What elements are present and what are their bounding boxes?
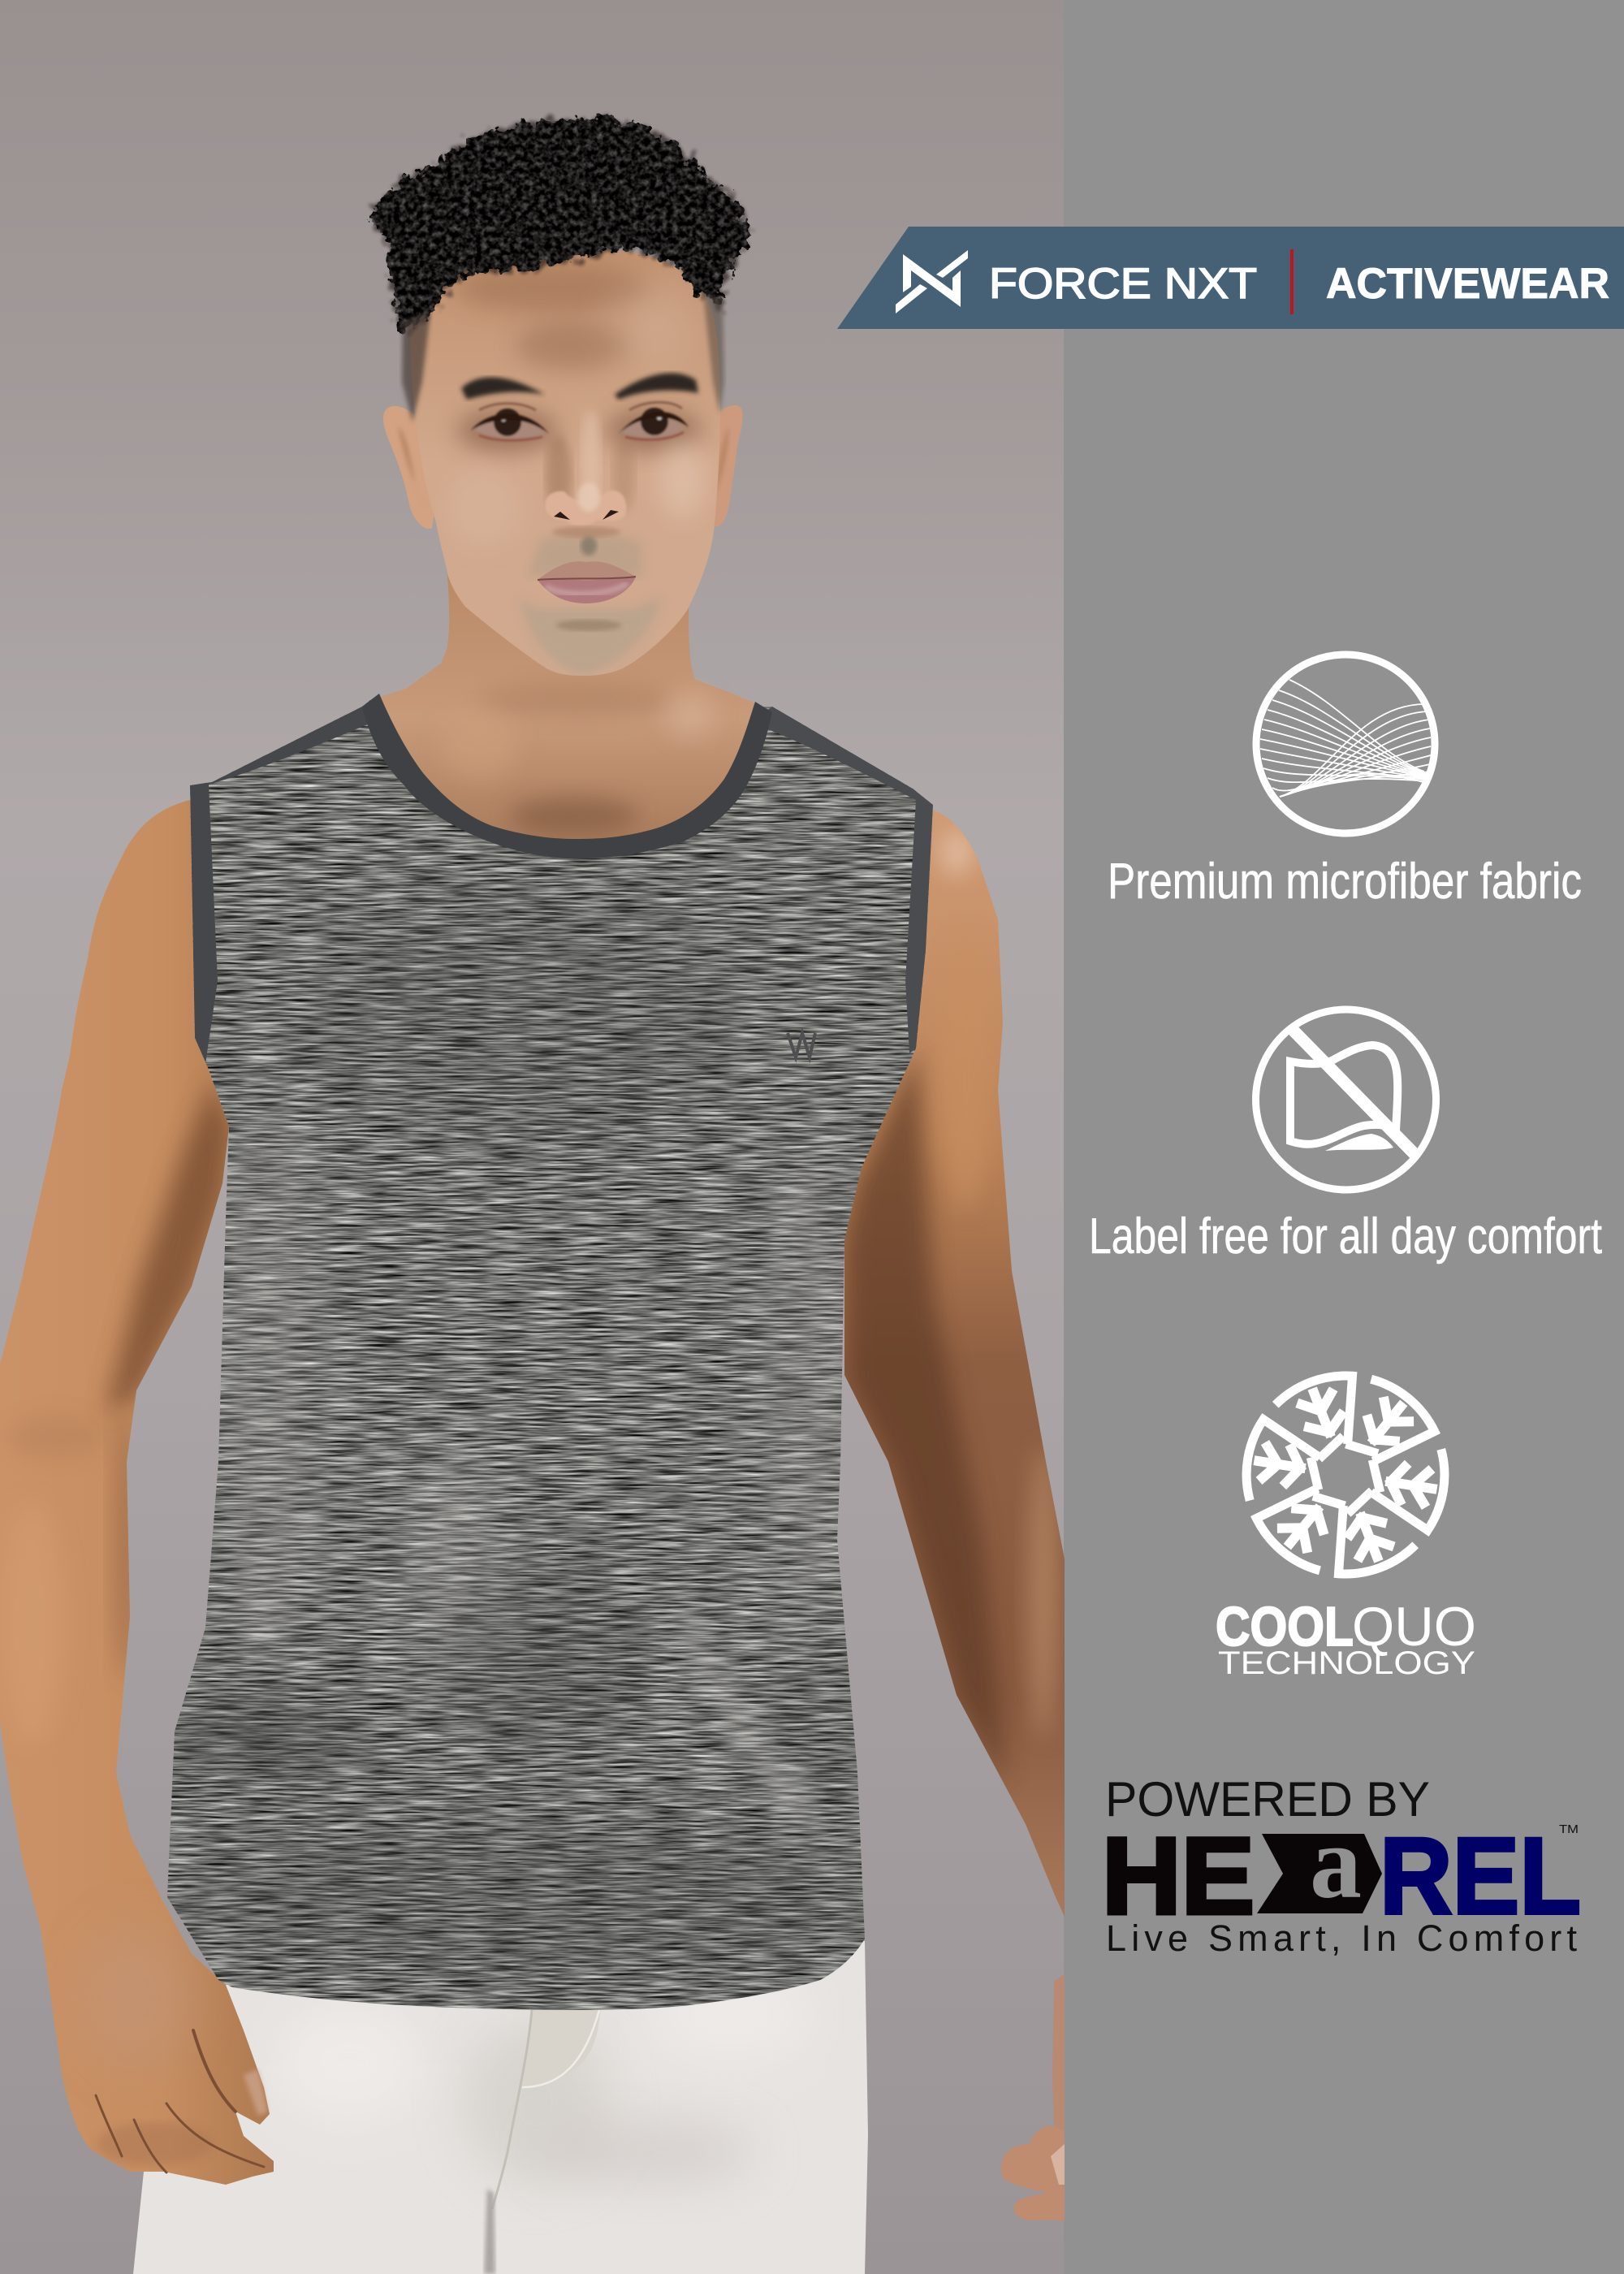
- chest logo: [788, 1033, 815, 1057]
- powered by: POWERED BY: [1105, 1772, 1430, 1827]
- feature: coolquo technology: [1216, 1364, 1476, 1681]
- head: [369, 118, 748, 676]
- feature: microfiber fabric: [1108, 655, 1582, 910]
- brand banner: [837, 227, 1624, 329]
- icon: crossed-out tag: [1255, 1009, 1436, 1190]
- brand name: FORCE NXT: [989, 260, 1257, 308]
- white shorts: [133, 1941, 868, 2274]
- hexarel wordmark: [1102, 1805, 1581, 1937]
- left hand fingers: [96, 2030, 264, 2172]
- powered by hexarel logo: [1102, 1772, 1581, 1959]
- right arm: [844, 811, 1065, 1917]
- tagline: Live Smart, In Comfort: [1106, 1917, 1577, 1959]
- hair: [369, 118, 748, 422]
- icon: woven fibers: [1256, 655, 1435, 833]
- activewear label: ACTIVEWEAR: [1326, 260, 1609, 308]
- coolquo wordmark: [1216, 1596, 1476, 1681]
- brand logo mark: [896, 250, 968, 313]
- hexarel wordmark: REL: [1380, 1816, 1581, 1937]
- right side panel: [1064, 0, 1624, 2274]
- photo background: [0, 0, 1065, 2274]
- dark yoke and armhole binding: [190, 707, 382, 1070]
- right hand at panel edge: [1001, 1974, 1065, 2221]
- left arm: [0, 800, 274, 2185]
- fly placket: [529, 2009, 601, 2063]
- coolquo wordmark: COOL: [1216, 1596, 1354, 1658]
- hexarel wordmark: a: [1310, 1805, 1362, 1920]
- hexarel wordmark: TM: [1559, 1822, 1579, 1836]
- coolquo wordmark: TECHNOLOGY: [1218, 1645, 1475, 1681]
- hexarel wordmark: HE: [1102, 1816, 1255, 1937]
- face: [410, 250, 720, 676]
- left eye: [471, 404, 549, 440]
- lips: [538, 561, 636, 603]
- model photo: [0, 118, 1065, 2274]
- icon: snowflake ring: [1221, 1364, 1470, 1585]
- red divider: [1290, 249, 1294, 314]
- feature: label free: [1089, 1009, 1602, 1265]
- fabric shading: [171, 885, 869, 1982]
- neck and chest: [370, 560, 763, 849]
- coolquo wordmark: QUO: [1352, 1596, 1476, 1658]
- stubble shadow: [528, 533, 641, 577]
- left eyebrow: [461, 378, 545, 400]
- right eye: [619, 402, 689, 439]
- left ear: [383, 406, 438, 529]
- heather fabric texture: [154, 682, 942, 2030]
- neck collar band: [362, 694, 772, 858]
- nose: [545, 482, 626, 538]
- right ear: [702, 405, 743, 526]
- right eyebrow: [615, 373, 698, 400]
- heathered sleeveless shirt: [154, 682, 942, 2030]
